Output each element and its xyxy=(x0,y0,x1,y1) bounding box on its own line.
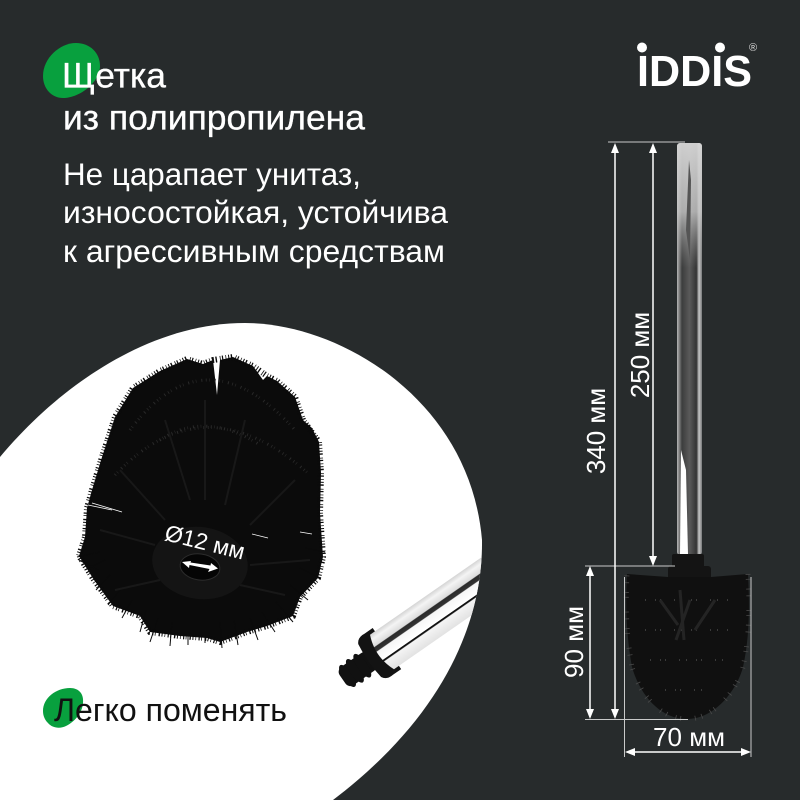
loose bristles xyxy=(77,520,325,648)
bristle silhouette xyxy=(79,357,323,642)
dimension: 90 mm xyxy=(559,566,594,719)
collar xyxy=(672,554,704,568)
bristle gaps xyxy=(88,503,312,538)
dimension: 90 mm: 90 мм xyxy=(559,606,589,678)
bristle texture xyxy=(115,380,310,475)
handle tube xyxy=(370,557,482,670)
threaded stub xyxy=(338,652,375,687)
caption text: Легко поменять xyxy=(54,692,287,728)
description text: износостойкая, устойчива xyxy=(63,194,448,230)
diameter arrow xyxy=(182,561,218,572)
dimension: 340 mm: 340 мм xyxy=(581,388,611,474)
dimension: 250 mm: 250 мм xyxy=(625,312,655,398)
dimension: 250 mm xyxy=(625,143,657,566)
dimension: 70 mm: 70 мм xyxy=(653,722,725,752)
dimension lines xyxy=(585,142,751,757)
white blob panel xyxy=(0,323,482,800)
chrome tube xyxy=(677,143,702,555)
collar xyxy=(358,628,402,678)
product: full brush xyxy=(626,143,749,719)
heading block: из полипропилена xyxy=(63,98,365,138)
logo: ® xyxy=(749,42,757,54)
icon: green blob heading xyxy=(43,43,100,98)
description text: Не царапает унитаз, xyxy=(63,156,361,192)
hub disc xyxy=(147,521,253,605)
description text xyxy=(63,156,448,269)
dimension: 70 mm xyxy=(625,722,751,756)
heading: Щетка xyxy=(62,56,166,96)
diameter label: Ø12 мм xyxy=(162,520,248,564)
bristle fringe xyxy=(626,574,749,719)
bristle fringe xyxy=(79,357,323,642)
bristles xyxy=(626,574,749,719)
dimension: 340 mm xyxy=(581,143,619,719)
chrome highlight bottom xyxy=(680,450,688,554)
chrome handle, close-up xyxy=(338,557,482,687)
heading block xyxy=(43,43,365,138)
icon: green blob caption xyxy=(43,688,83,728)
chrome highlight top xyxy=(677,143,702,268)
caption xyxy=(43,688,287,728)
logo: IDDIS xyxy=(637,47,752,96)
hub hole xyxy=(178,551,222,583)
bristle specks xyxy=(645,600,732,690)
description text: к агрессивным средствам xyxy=(63,233,445,269)
brush head, bottom view xyxy=(77,357,325,648)
